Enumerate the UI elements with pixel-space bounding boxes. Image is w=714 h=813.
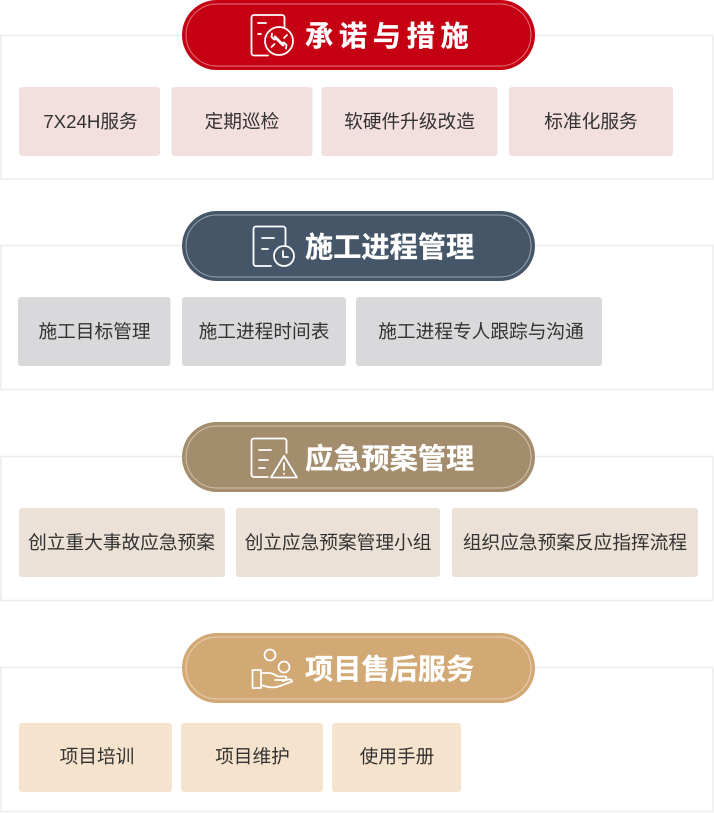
panel: commitments and measures xyxy=(1,0,713,179)
header pill: commitments xyxy=(182,0,535,70)
tag: standard service xyxy=(509,87,673,156)
tag: project maintenance: 项目维护 xyxy=(215,746,290,767)
tag: command process: 组织应急预案反应指挥流程 xyxy=(463,532,687,553)
header pill: schedule xyxy=(182,211,535,281)
heading: commitments: 承诺与措施 xyxy=(305,20,474,52)
tag: user manual xyxy=(332,723,461,792)
tag: upgrades xyxy=(322,87,498,156)
tag: timetable xyxy=(182,297,346,366)
tag: target management xyxy=(18,297,170,366)
panel: after-sales service xyxy=(1,633,713,812)
tag: project maintenance xyxy=(181,723,323,792)
tag: standard service: 标准化服务 xyxy=(544,111,638,132)
after-sales tag row xyxy=(19,723,461,792)
tag: dedicated tracking xyxy=(356,297,602,366)
tag: timetable: 施工进程时间表 xyxy=(199,321,330,342)
tag: major accident plan xyxy=(19,508,225,577)
icon: wrench on document xyxy=(252,15,293,56)
tag: regular inspection: 定期巡检 xyxy=(205,111,280,132)
tag: upgrades: 软硬件升级改造 xyxy=(344,111,475,132)
icon: document with clock xyxy=(254,226,294,266)
tag: target management: 施工目标管理 xyxy=(38,321,151,342)
tag: command process xyxy=(452,508,698,577)
header pill: emergency xyxy=(182,422,535,492)
header pill: after-sales xyxy=(182,633,535,703)
tag: plan management team xyxy=(236,508,440,577)
schedule tag row xyxy=(18,297,602,366)
panel: construction schedule management xyxy=(1,211,713,390)
tag: 7X24H service xyxy=(19,87,160,156)
tag: user manual: 使用手册 xyxy=(360,746,434,767)
tag: major accident plan: 创立重大事故应急预案 xyxy=(28,532,215,553)
icon: document with warning triangle xyxy=(252,438,297,478)
tag: project training xyxy=(19,723,172,792)
heading: schedule: 施工进程管理 xyxy=(305,231,474,263)
heading: emergency: 应急预案管理 xyxy=(305,442,474,474)
tag: plan management team: 创立应急预案管理小组 xyxy=(245,532,431,553)
tag: dedicated tracking: 施工进程专人跟踪与沟通 xyxy=(378,321,584,342)
heading: after-sales: 项目售后服务 xyxy=(305,653,474,685)
tag: regular inspection xyxy=(172,87,312,156)
panel: emergency plan management xyxy=(1,422,713,600)
tag: 7X24H service: 7X24H服务 xyxy=(43,111,138,132)
tag: project training: 项目培训 xyxy=(60,746,134,767)
service tag row xyxy=(19,87,673,156)
emergency tag row xyxy=(19,508,698,577)
icon: hand holding coins xyxy=(252,650,292,688)
